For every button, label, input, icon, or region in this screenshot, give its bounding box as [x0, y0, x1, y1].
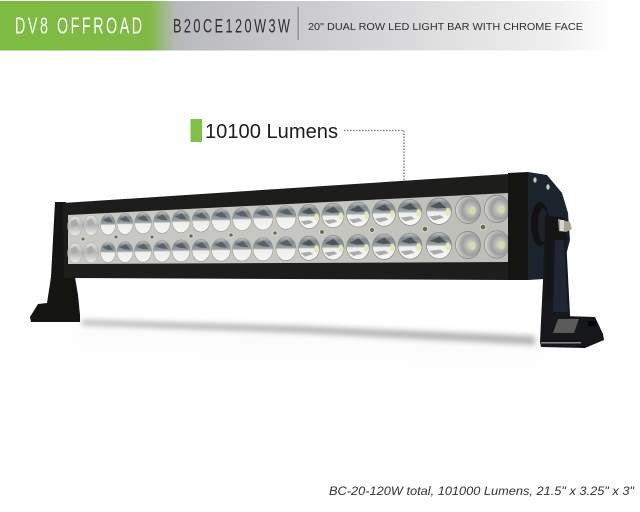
light bar housing [63, 174, 508, 280]
ground shadow [70, 320, 545, 362]
lumens callout [190, 119, 404, 200]
arm [540, 215, 572, 345]
left mount bracket [30, 202, 80, 322]
left column LEDs [68, 215, 98, 263]
chrome LED panel [68, 193, 510, 264]
product description: 20" DUAL ROW LED LIGHT BAR WITH CHROME FACE [308, 21, 583, 33]
header band [0, 1, 640, 50]
dotted leader arrow [344, 130, 404, 200]
foot [540, 316, 604, 348]
product code: B20CE120W3W [173, 16, 290, 37]
bolt holes [533, 177, 537, 183]
end reflector LEDs [456, 195, 510, 258]
right end cap [508, 172, 528, 280]
spec caption: BC-20-120W total, 101000 Lumens, 21.5" x 3.25" x 3" [329, 486, 635, 498]
right LEDs with visible emitters [298, 198, 452, 260]
back plate [528, 172, 570, 280]
green marker [190, 119, 202, 142]
pivot knob [531, 202, 549, 246]
lumens label: 10100 Lumens [205, 121, 338, 143]
panel screws [81, 224, 486, 241]
centre LEDs [100, 206, 296, 263]
screw [558, 219, 572, 232]
right mount bracket [528, 172, 604, 348]
brand name: DV8 OFFROAD [15, 14, 142, 40]
